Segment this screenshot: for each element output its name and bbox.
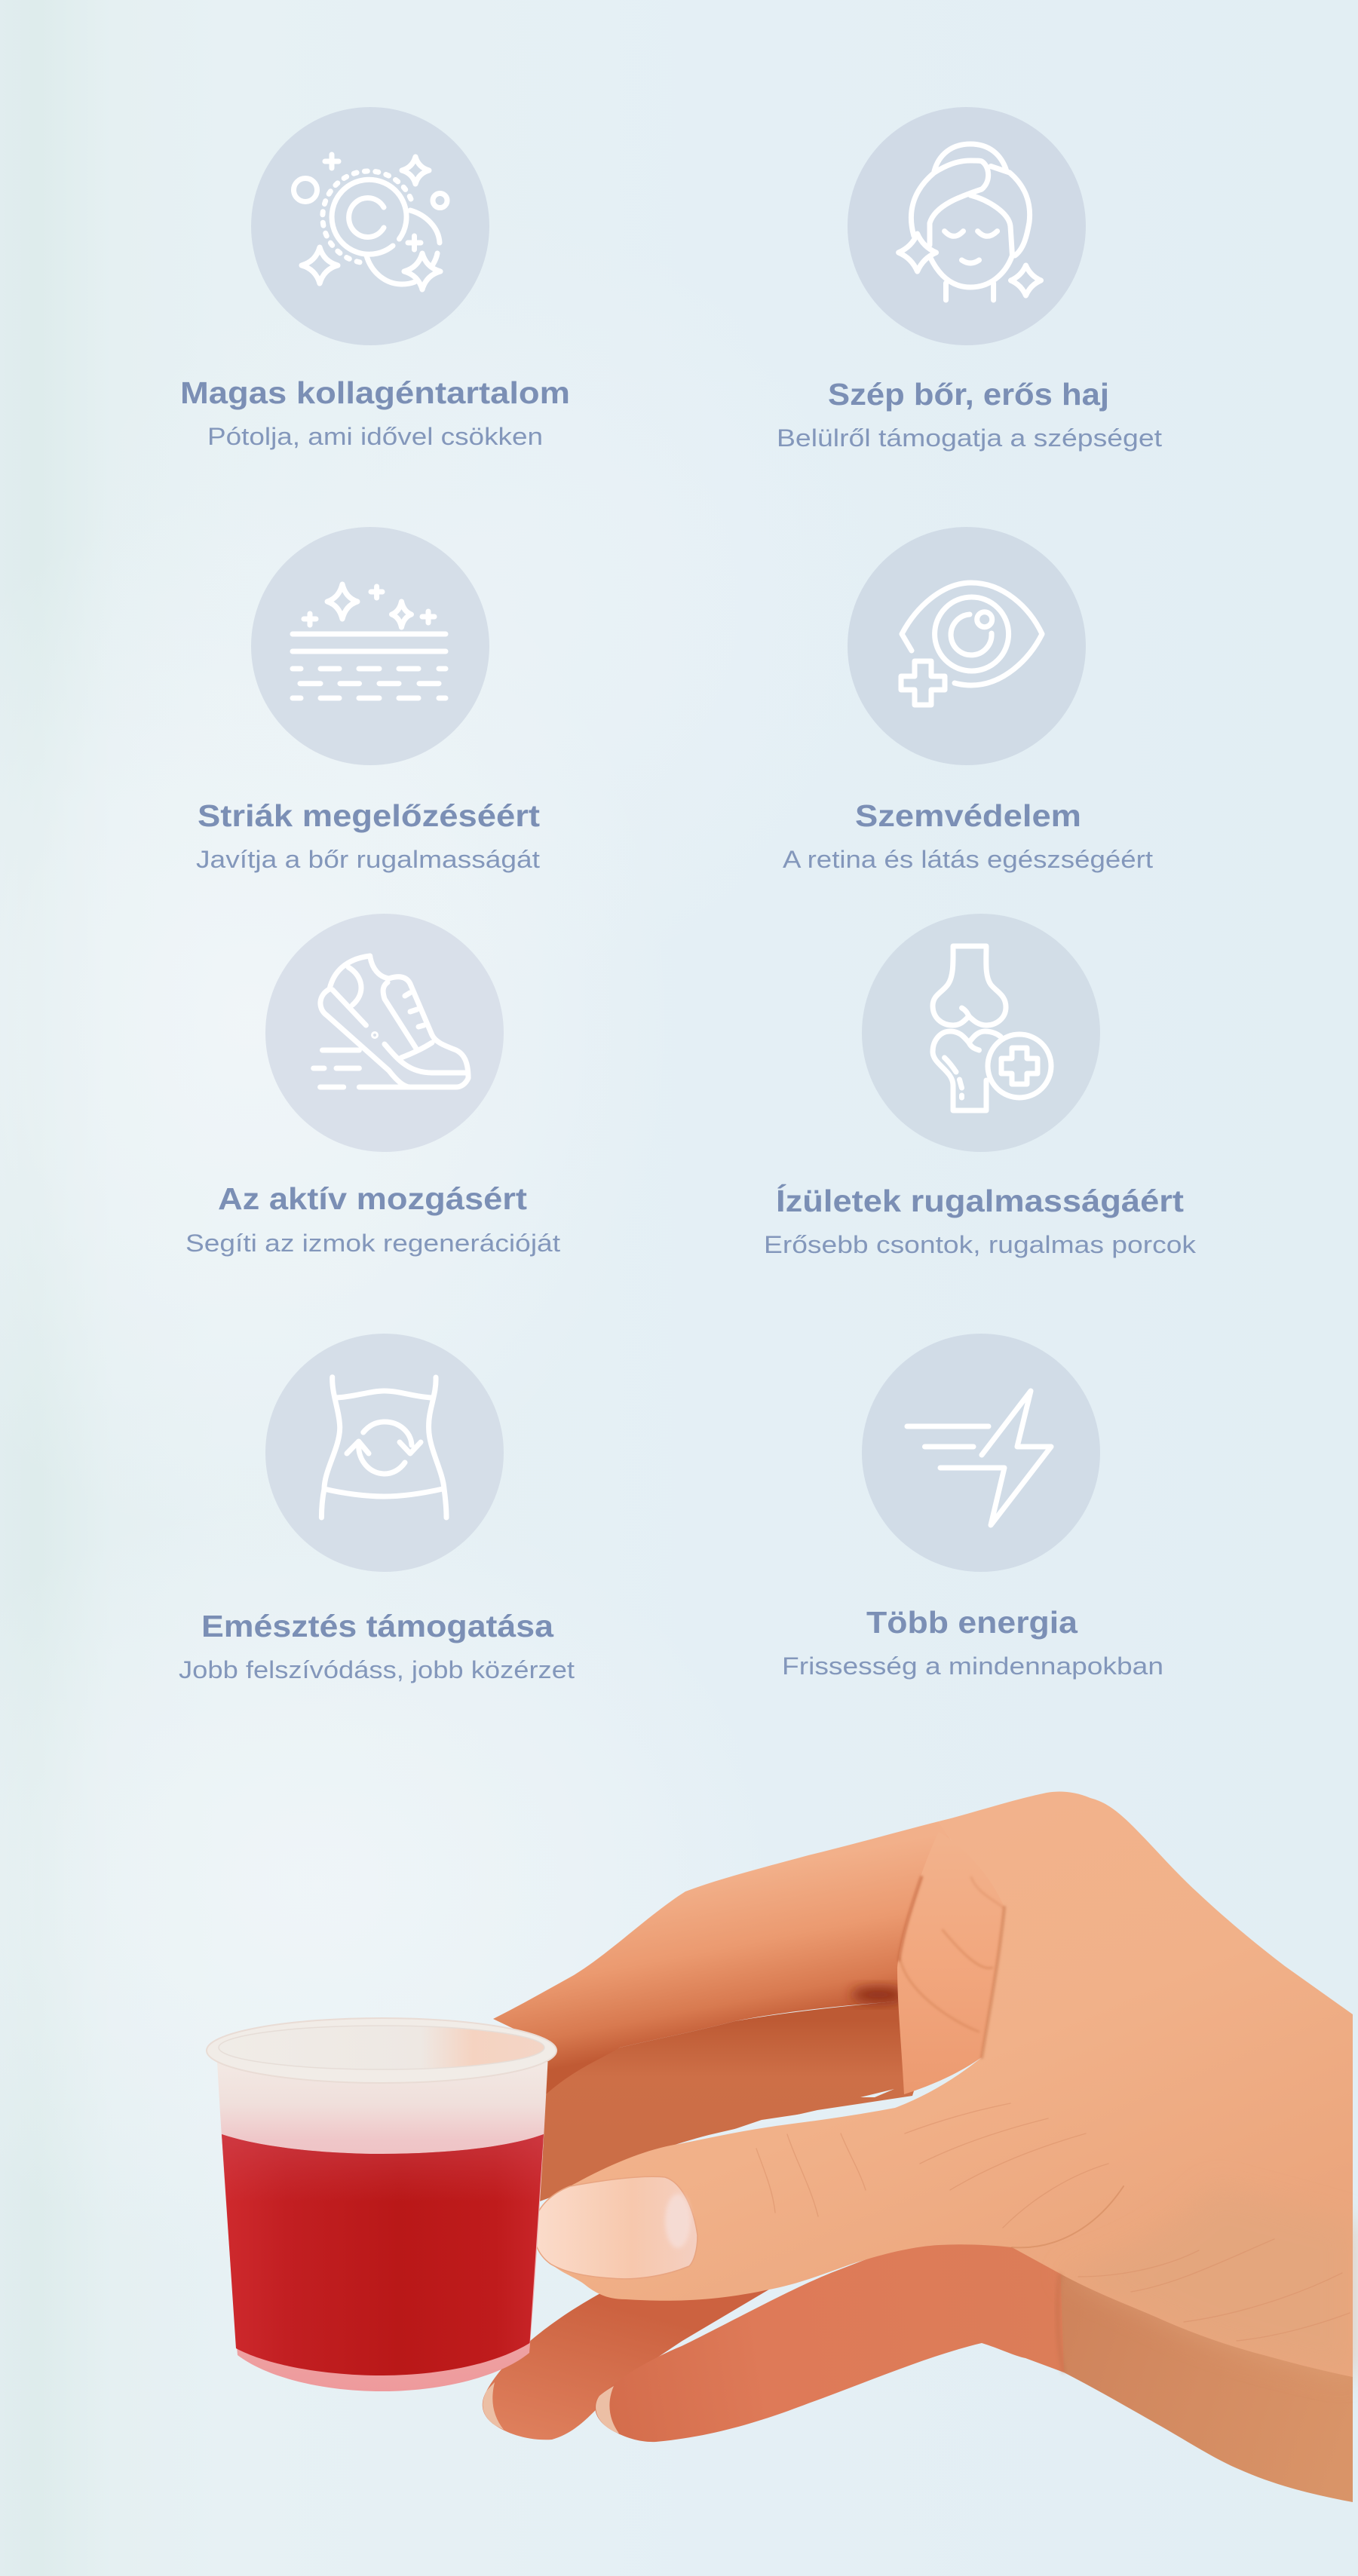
benefit: Magas kollagéntartalom: [180, 107, 570, 450]
icon: vitamin C collagen sparkle: [294, 155, 447, 289]
heading: Emésztés támogatása: [201, 1609, 554, 1643]
liquid surface highlight: [222, 2134, 544, 2201]
little finger: [595, 2231, 1093, 2442]
benefit: Emésztés támogatása: [179, 1334, 575, 1683]
icon circle: [265, 1334, 504, 1572]
wrist crease: [1058, 2274, 1064, 2372]
middle finger: [540, 1975, 950, 2201]
description: Erősebb csontok, rugalmas porcok: [764, 1231, 1197, 1258]
benefit: Szép bőr, erős haj: [777, 107, 1162, 452]
wrist underside: [1060, 2262, 1353, 2502]
description: Javítja a bőr rugalmasságát: [196, 846, 540, 873]
description: Frissesség a mindennapokban: [782, 1652, 1163, 1680]
icon: running shoe: [314, 956, 468, 1087]
icon: eye with medical cross: [901, 583, 1042, 705]
finger gap sliver: [722, 2089, 894, 2133]
heading: Több energia: [866, 1605, 1078, 1640]
icon circle: [862, 1334, 1100, 1572]
icon circle: [251, 527, 489, 765]
cup rim: [207, 2018, 556, 2083]
cup body: [217, 2062, 547, 2391]
heading: Az aktív mozgásért: [218, 1181, 527, 1216]
icon: torso with digestion arrows: [321, 1377, 446, 1518]
description: Pótolja, ami idővel csökken: [207, 423, 543, 450]
description: A retina és látás egészségéért: [783, 846, 1153, 873]
benefit: Striák megelőzéséért: [196, 527, 540, 873]
description: Segíti az izmok regenerációját: [185, 1230, 560, 1257]
icon: knee joint with cross: [933, 946, 1051, 1110]
icon circle: [251, 107, 489, 345]
heading: Striák megelőzéséért: [198, 798, 540, 833]
wrist shading: [1060, 2186, 1353, 2377]
description: Jobb felszívódáss, jobb közérzet: [179, 1656, 575, 1683]
heading: Szemvédelem: [855, 798, 1081, 833]
hand holding the cup: [483, 1791, 1353, 2502]
icon: skin layers with sparkles: [293, 584, 446, 698]
icon circle: [848, 527, 1086, 765]
icon: lightning bolt with speed lines: [907, 1391, 1051, 1525]
description: Belülről támogatja a szépséget: [777, 424, 1162, 452]
rim opening: [219, 2026, 544, 2069]
nail lunula: [665, 2194, 691, 2248]
icon circle: [862, 914, 1100, 1152]
little fingernail edge: [596, 2386, 619, 2434]
heading: Magas kollagéntartalom: [180, 375, 570, 410]
skin wrinkles: [756, 2103, 1350, 2341]
icon circle: [265, 914, 504, 1152]
benefit: Több energia: [782, 1334, 1163, 1680]
benefit: Az aktív mozgásért: [185, 914, 560, 1257]
palm creases: [899, 1877, 1004, 2057]
palm fold: [897, 1832, 1004, 2094]
ring fingernail edge: [483, 2382, 504, 2430]
icon circle: [848, 107, 1086, 345]
thumbnail: [534, 2176, 697, 2279]
index finger: [493, 1821, 980, 2103]
heading: Ízületek rugalmasságáért: [776, 1184, 1184, 1218]
cup with red liquid: [207, 2018, 556, 2391]
ring finger: [483, 2280, 784, 2440]
back of hand and thumb: [534, 1791, 1353, 2377]
heading: Szép bőr, erős haj: [828, 377, 1109, 412]
benefit: Szemvédelem: [783, 527, 1153, 873]
benefit: Ízületek rugalmasságáért: [764, 914, 1197, 1258]
finger shadow: [851, 1987, 906, 2002]
red liquid: [222, 2134, 544, 2375]
icon: face with towel and sparkles: [899, 144, 1041, 300]
